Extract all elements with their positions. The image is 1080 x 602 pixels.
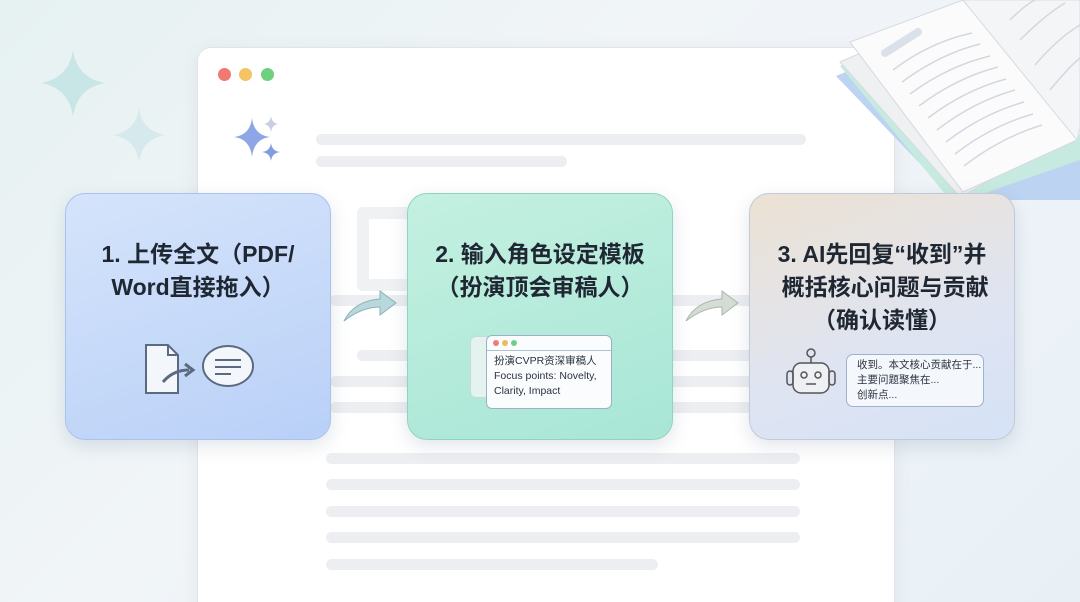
- icon: open book: [836, 0, 1080, 200]
- speech bubble: 收到。本文核心贡献在于...: [857, 359, 981, 371]
- window snippet: Focus points: Novelty,: [494, 370, 597, 382]
- speech bubble: 创新点...: [857, 389, 897, 401]
- browser window: [197, 47, 895, 602]
- icon: ai sparkle: [234, 116, 280, 161]
- arrow 1: [344, 290, 397, 322]
- icon: file and chat: [145, 344, 254, 394]
- arrow 2: [686, 290, 739, 322]
- heading 3: （确认读懂）: [813, 307, 951, 333]
- sparkles decoration: [42, 51, 164, 161]
- heading 3: 概括核心问题与贡献: [782, 274, 989, 300]
- window snippet: [470, 335, 612, 409]
- heading 1: Word直接拖入）: [111, 274, 285, 300]
- icon: robot: [786, 348, 836, 394]
- heading 2: [435, 241, 645, 300]
- heading 2: （扮演顶会审稿人）: [436, 274, 644, 300]
- heading 3: [778, 241, 989, 333]
- heading 3: 3. AI先回复“收到”并: [778, 241, 986, 267]
- card 3: AI response: [749, 193, 1015, 440]
- heading 1: 1. 上传全文（PDF/: [102, 241, 294, 267]
- heading 1: [102, 241, 294, 300]
- heading 2: 2. 输入角色设定模板: [435, 241, 645, 267]
- window snippet: Clarity, Impact: [494, 385, 560, 397]
- speech bubble: [846, 354, 984, 407]
- card 2: role template: [407, 193, 673, 440]
- window snippet: 扮演CVPR资深审稿人: [494, 355, 597, 367]
- speech bubble: 主要问题聚焦在...: [857, 374, 939, 386]
- card 1: upload: [65, 193, 331, 440]
